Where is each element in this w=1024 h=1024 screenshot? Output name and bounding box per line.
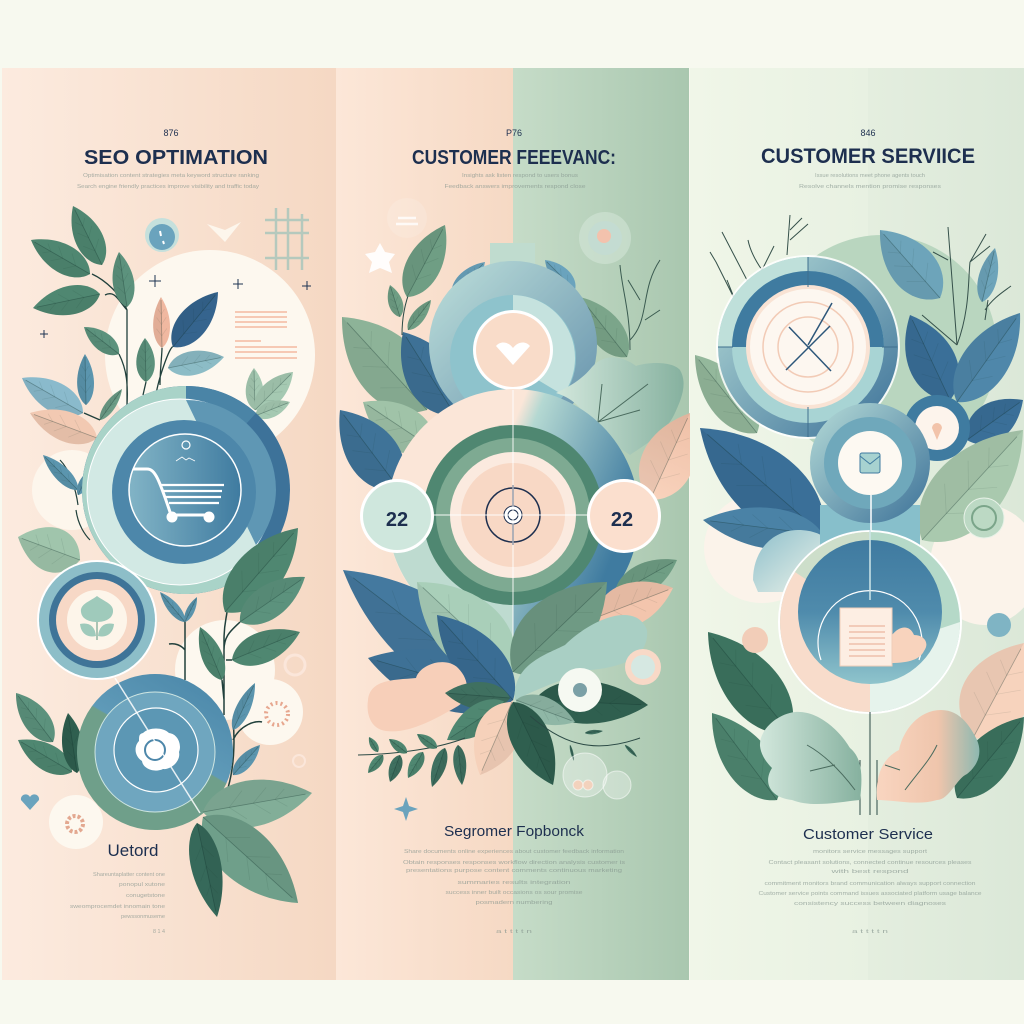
icon: plant: [80, 596, 114, 640]
bubbles: [563, 753, 631, 799]
panel: customer feedback: [318, 68, 714, 980]
icon: top right button: [579, 212, 631, 264]
fuzzy leaf: [556, 357, 684, 455]
icon: white flower: [136, 728, 180, 771]
text block: Segromer: success inner built occasions os sour promise: [446, 890, 583, 896]
icon: heart: [496, 342, 530, 365]
heading: service: CUSTOMER SERVIICE: [761, 145, 975, 168]
icon: grid: [265, 208, 309, 270]
decorations: [387, 198, 427, 238]
white circle badge: [49, 795, 103, 849]
branch: lower left sprig: [358, 730, 468, 789]
leaf: small green: [608, 547, 684, 608]
icon: flower: [266, 703, 288, 725]
text block: Uetord: Uetord: [108, 841, 158, 860]
backdrop green circle: [767, 235, 997, 465]
leaf cluster: lower left and right: [677, 402, 1024, 563]
leaf: peach right: [626, 402, 714, 511]
icon: blue star: [394, 797, 418, 821]
leaf cluster: bottom: [687, 615, 1024, 814]
circle: white rose badge: [558, 668, 602, 712]
text block: Segromer: Segromer Fopbonck: [444, 823, 585, 840]
text block: service: Contact pleasant solutions, connected continue resources pleases: [768, 860, 972, 866]
icon: small button: [145, 218, 179, 252]
circle: green ring: [964, 498, 1004, 538]
leaf cluster: upper right: [679, 215, 1024, 455]
vertical stems: [860, 712, 877, 815]
text block: service: monitors service messages support: [813, 849, 928, 855]
heading: customer: P76: [506, 128, 522, 138]
icon: cart: [133, 441, 224, 522]
icon: sparkles: [40, 275, 311, 338]
text block: Uetord: [70, 841, 165, 935]
heading: SEO: Search engine friendly practices improve visibility and traffic today: [77, 184, 260, 190]
decorative bubbles: [742, 613, 1011, 653]
heading: service: Issue resolutions meet phone agents touch: [815, 173, 925, 179]
heading: service: 846: [860, 128, 876, 138]
mound: right peach: [877, 710, 979, 803]
heading: customer: [412, 128, 616, 190]
chart circle: mail: [810, 403, 930, 545]
heading: customer: Feedback answers improvements respond close: [444, 184, 586, 190]
heading: SEO: 876: [163, 128, 179, 138]
text block: Segromer: presentations purpose content comments continuous marketing: [406, 868, 622, 874]
leaf: pale green left: [10, 516, 88, 581]
text block: Segromer: summaries results integration: [458, 880, 571, 886]
icon: crosshair: [486, 485, 540, 545]
circle: 22 left: 22: [386, 509, 408, 531]
small circle: pin: [904, 395, 970, 461]
chart circle: bottom badge: [48, 645, 262, 859]
leaf cluster: blue curl: [38, 450, 94, 540]
circle: peach bubble: [625, 649, 661, 685]
circle: 22 right: [587, 479, 661, 553]
icon: envelope: [860, 453, 880, 473]
cream backdrops: [704, 493, 1024, 625]
icon: bird shape: [207, 222, 241, 242]
text block: Uetord: 8 1 4: [153, 929, 165, 935]
icon: heart: [21, 794, 39, 810]
heading: customer: Insights ask listen respond to users bonus: [462, 173, 579, 179]
heading: SEO: SEO OPTIMATION: [84, 147, 268, 169]
branch: lower right sprig: [530, 716, 640, 761]
heading: SEO: [77, 128, 268, 190]
chart: target: [387, 389, 639, 641]
leaf cluster: middle: [156, 513, 316, 788]
leaf cluster: lower: [321, 541, 649, 793]
text block: Uetord: conugetstone: [126, 893, 165, 899]
text block: Segromer: Obtain responses responses workflow direction analysis customer is: [403, 860, 626, 866]
backdrop white circles: [32, 250, 315, 745]
heading: service: Resolve channels mention promise responses: [799, 184, 942, 190]
text block: service: Customer Service: [803, 826, 933, 843]
twigs: [710, 215, 1011, 345]
text block: service: consistency success between diagnoses: [794, 901, 947, 907]
fuzzy mound: [753, 530, 828, 592]
text block: Uetord: Shareuntaplatter content one: [93, 872, 165, 878]
text block: Segromer: posmadern numbering: [476, 900, 553, 906]
heading: service: [761, 128, 975, 190]
circle: 22 right: 22: [611, 509, 633, 531]
heading: SEO: Optimisation content strategies meta keyword structure ranking: [83, 173, 259, 179]
rings decoration: [285, 655, 305, 767]
chart circle: X target: [716, 255, 900, 439]
text block: Segromer: [403, 823, 626, 935]
leaf: peach small: [587, 568, 681, 638]
text block: Segromer: Share documents online experiences about customer feedback information: [404, 849, 624, 855]
leaf cluster: top and sides: [318, 217, 640, 505]
chart circle: plant: [37, 560, 157, 680]
text lines: [235, 311, 297, 359]
leaf cluster: bottom right: [182, 770, 316, 923]
leaf cluster: bottom left: [6, 685, 88, 783]
text block: service: commitment monitors brand communication always support connection: [764, 881, 976, 887]
text block: service: Customer service points command issues associated platform usage balance: [758, 891, 982, 897]
mound: left mint: [760, 712, 861, 804]
text block: Segromer: a t t t t n: [496, 929, 532, 935]
text block: service: a t t t t n: [852, 929, 888, 935]
icon: document and cloud: [840, 608, 926, 666]
text block: Uetord: ponopul xutone: [119, 882, 165, 888]
icon: X: [786, 303, 832, 371]
panel: SEO optimisation: [2, 68, 336, 980]
text block: Uetord: sweomprocemdet innomain tone: [70, 904, 165, 910]
text block: service: [758, 826, 982, 935]
branch: top right: [620, 260, 660, 350]
text block: Uetord: pewssonmuseme: [121, 914, 165, 920]
circle: 22 left: [360, 479, 434, 553]
leaf cluster: top: [15, 200, 301, 452]
badge: top ring: [429, 243, 597, 429]
icon: white star: [365, 243, 395, 273]
text block: service: with best respond: [832, 869, 909, 875]
panel: customer service: [677, 68, 1024, 980]
chart circle: shopping cart: [82, 386, 290, 594]
heading: customer: CUSTOMER FEEEVANC:: [412, 147, 616, 169]
chart circle: document: [778, 530, 962, 714]
